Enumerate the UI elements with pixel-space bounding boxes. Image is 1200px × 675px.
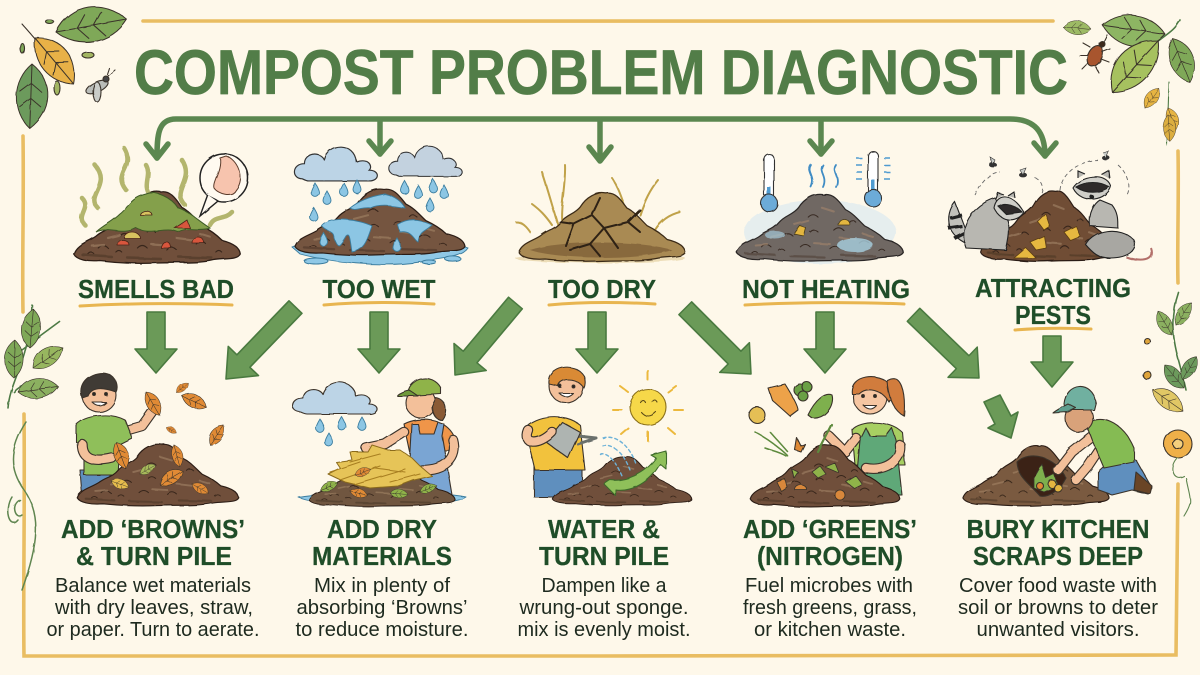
flow lines: title to five problems xyxy=(146,119,1056,161)
arrow: too dry to add greens xyxy=(670,293,766,389)
heading: bury kitchen scraps: SCRAPS DEEP xyxy=(973,543,1143,571)
text: water and turn description: Dampen like a xyxy=(542,575,667,597)
icon: cold waves xyxy=(810,165,837,187)
decoration: top-right leaves and beetle xyxy=(1062,11,1200,145)
icon: flies xyxy=(989,151,1110,177)
text: add greens description: Fuel microbes with xyxy=(745,575,913,597)
heading: add dry materials xyxy=(312,516,452,571)
title: COMPOST PROBLEM DIAGNOSTIC xyxy=(134,38,1068,108)
label: attracting pests xyxy=(975,275,1131,330)
text: water and turn description xyxy=(518,575,690,641)
illustration: person watering pile with sun xyxy=(525,367,692,505)
illustration: rain-soaked pile xyxy=(292,146,468,264)
decoration: top-left leaves and fly xyxy=(15,1,130,129)
text: add dry materials description xyxy=(296,575,468,641)
text: bury kitchen scraps description: unwanted visitors. xyxy=(976,619,1140,641)
text: bury kitchen scraps description: Cover food waste with xyxy=(959,575,1157,597)
heading: add greens xyxy=(743,516,917,571)
label: too wet: TOO WET xyxy=(322,276,436,304)
text: add browns description: with dry leaves, straw, xyxy=(54,597,253,619)
label: not heating: NOT HEATING xyxy=(742,276,910,304)
text: water and turn description: wrung-out sponge. xyxy=(518,597,688,619)
arrow: too dry to add dry materials xyxy=(439,289,532,388)
text: add dry materials description: absorbing ‘Browns’ xyxy=(296,597,468,619)
illustration: person adding leaves xyxy=(76,373,239,506)
illustration: person adding straw in rain xyxy=(293,378,466,506)
heading: bury kitchen scraps: BURY KITCHEN xyxy=(966,516,1150,544)
text: bury kitchen scraps description: soil or browns to deter xyxy=(958,597,1158,619)
label: smells bad: SMELLS BAD xyxy=(78,276,234,304)
fix: water and turn pile xyxy=(518,367,692,641)
arrow: small into hole xyxy=(984,395,1018,438)
illustration: raccoons, rat and flies on pile xyxy=(948,151,1152,261)
icon: thermometer left xyxy=(760,154,778,212)
heading: add browns: ADD ‘BROWNS’ xyxy=(61,516,245,544)
illustration: person burying scraps in pile xyxy=(963,386,1152,506)
arrow: smells bad to add browns xyxy=(135,312,177,373)
text: add dry materials description: to reduce moisture. xyxy=(296,619,468,641)
heading: add browns xyxy=(61,516,245,571)
text: add greens description xyxy=(743,575,917,641)
label: attracting pests: ATTRACTING xyxy=(975,275,1131,303)
problem: smells bad xyxy=(74,148,248,306)
text: add dry materials description: Mix in plenty of xyxy=(314,575,450,597)
icon: nose speech bubble xyxy=(200,154,248,216)
text: add greens description: or kitchen waste. xyxy=(754,619,906,641)
icon: beetle xyxy=(1079,35,1110,73)
arrow: attracting pests to bury scraps xyxy=(1031,336,1073,387)
fix: add browns and turn pile xyxy=(46,373,260,641)
fix: add dry materials xyxy=(293,378,468,641)
problem: attracting pests xyxy=(948,151,1152,330)
illustration: cracked dry pile xyxy=(515,165,685,263)
arrows: problems to fixes xyxy=(135,289,1073,438)
text: add browns description: Balance wet materials xyxy=(55,575,251,597)
text: water and turn description: mix is evenly moist. xyxy=(518,619,690,641)
arrow: too wet to add dry materials xyxy=(358,312,400,373)
heading: add browns: & TURN PILE xyxy=(76,543,232,571)
label: too dry: TOO DRY xyxy=(548,276,656,304)
icon: thermometer right xyxy=(856,151,890,206)
text: add greens description: fresh greens, grass, xyxy=(743,597,917,619)
heading: water and turn pile xyxy=(539,516,669,571)
icon: flower xyxy=(1164,430,1192,516)
arrow: not heating to add greens xyxy=(804,312,846,373)
fix: add greens xyxy=(743,377,917,641)
icon: fly xyxy=(84,68,115,102)
heading: water and turn pile: WATER & xyxy=(548,516,660,544)
text: add browns description: or paper. Turn to aerate. xyxy=(46,619,260,641)
illustration: smelly pile xyxy=(74,148,248,263)
heading: add dry materials: MATERIALS xyxy=(312,543,452,571)
problem: too wet xyxy=(292,146,468,305)
label: attracting pests: PESTS xyxy=(1015,302,1091,330)
icon: raccoon left xyxy=(948,192,1024,250)
icon: rat xyxy=(1086,231,1152,260)
decoration: right side plant and flowers xyxy=(1143,292,1200,516)
illustration: person adding vegetables xyxy=(749,377,905,507)
text: bury kitchen scraps description xyxy=(958,575,1158,641)
arrow: too dry to water and turn xyxy=(576,312,618,373)
decoration: left side plant and vine xyxy=(4,305,67,590)
problem: not heating xyxy=(737,151,910,305)
text: add browns description xyxy=(46,575,260,641)
problem: too dry xyxy=(515,165,685,305)
heading: add dry materials: ADD DRY xyxy=(327,516,437,544)
icon: smiling sun xyxy=(613,371,683,441)
heading: water and turn pile: TURN PILE xyxy=(539,543,669,571)
illustration: cold grey pile with thermometers xyxy=(737,151,903,264)
heading: add greens: ADD ‘GREENS’ xyxy=(743,516,917,544)
icon: raccoon right xyxy=(1073,171,1118,228)
heading: bury kitchen scraps xyxy=(966,516,1150,571)
fix: bury kitchen scraps xyxy=(958,386,1158,641)
arrow: too wet to add browns xyxy=(211,292,311,394)
arrow: not heating to bury scraps xyxy=(899,300,994,393)
heading: add greens: (NITROGEN) xyxy=(757,543,903,571)
